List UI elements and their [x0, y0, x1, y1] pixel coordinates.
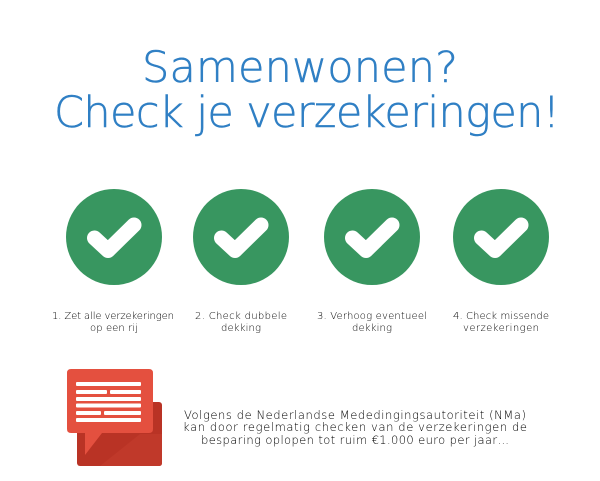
step 1 label: op een rij	[90, 323, 138, 334]
step 1 label	[52, 311, 174, 334]
step 3 label: dekking	[352, 323, 392, 334]
title	[54, 43, 560, 138]
icon: check 1	[66, 189, 162, 285]
step 4 label: 4. Check missende	[453, 311, 549, 322]
icon: speech bubbles	[67, 369, 162, 466]
title: Samenwonen?	[142, 43, 458, 93]
step 3 label	[317, 311, 427, 334]
callout text: kan door regelmatig checken van de verzekeringen de	[183, 420, 527, 434]
title: Check je verzekeringen!	[54, 88, 560, 138]
icon: check 2	[193, 189, 289, 285]
icon: check 4	[453, 189, 549, 285]
step 3 label: 3. Verhoog eventueel	[317, 311, 427, 322]
step 4 label	[453, 311, 549, 334]
step 1 label: 1. Zet alle verzekeringen	[52, 311, 174, 322]
step 2 label: dekking	[221, 323, 261, 334]
callout text	[183, 408, 527, 447]
step 2 label	[195, 311, 287, 334]
text lines in bubble	[76, 382, 141, 422]
step 2 label: 2. Check dubbele	[195, 311, 287, 322]
callout text: Volgens de Nederlandse Mededingingsautoriteit (NMa)	[184, 408, 526, 422]
callout text: besparing oplopen tot ruim €1.000 euro per jaar…	[201, 433, 509, 447]
icon: check 3	[324, 189, 420, 285]
step 4 label: verzekeringen	[463, 323, 539, 334]
